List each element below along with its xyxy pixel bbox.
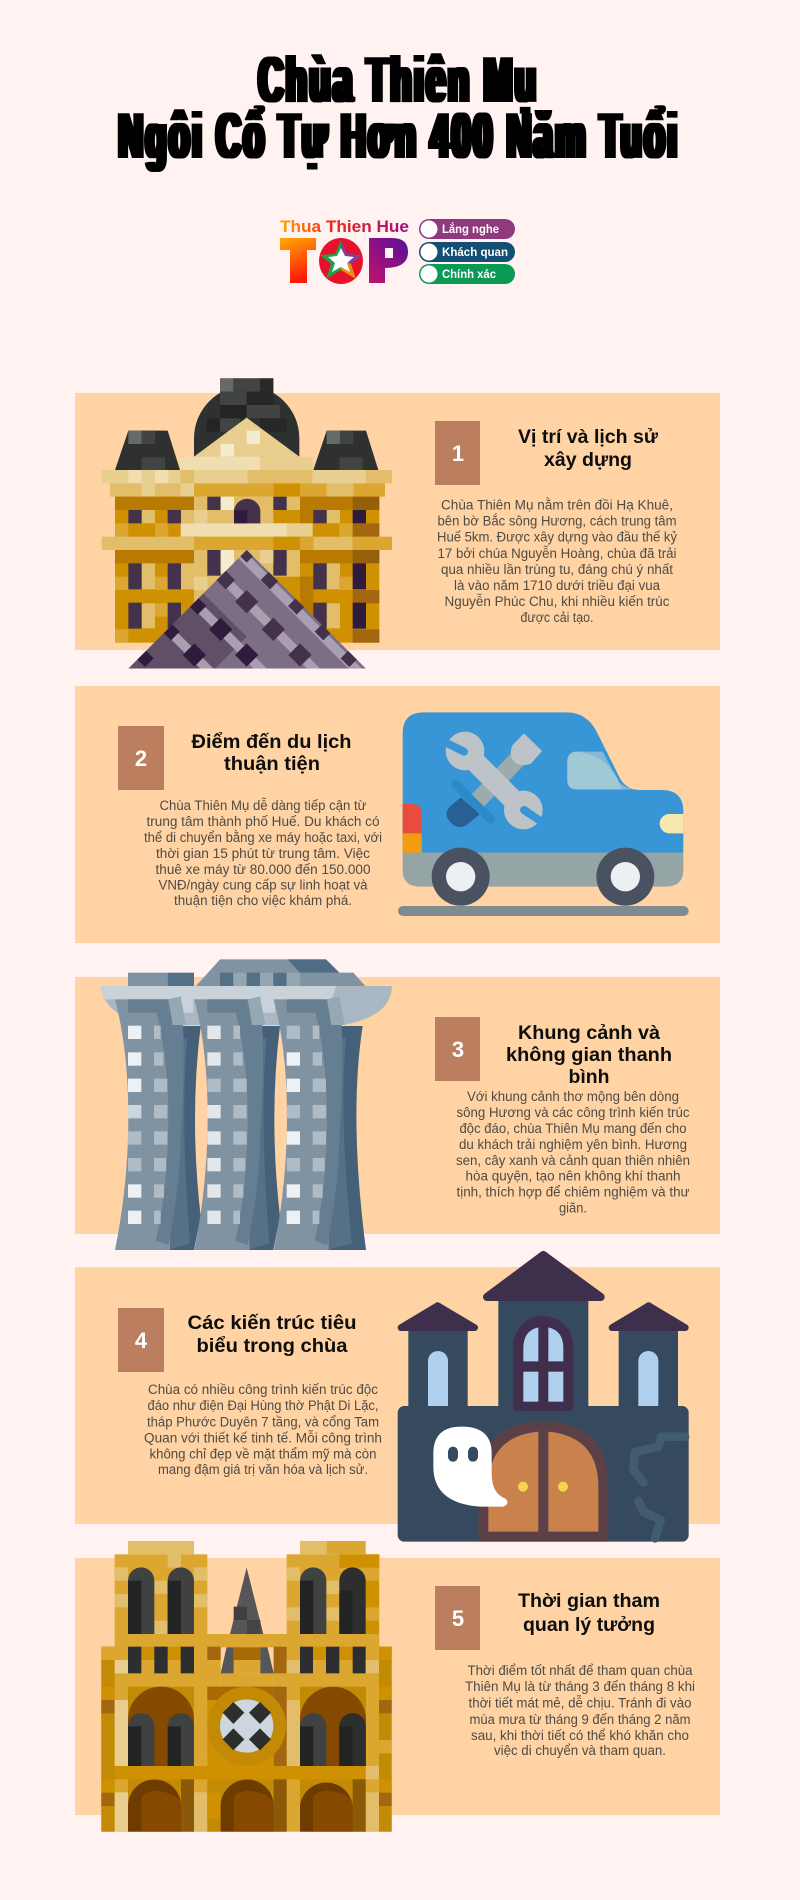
heading 4: Các kiến trúc tiêu	[188, 1313, 356, 1334]
heading 3: bình	[568, 1067, 610, 1088]
text block 5	[465, 1663, 695, 1758]
pill: lắng nghe	[419, 219, 515, 239]
pill: khách quan	[419, 242, 515, 262]
text block 2: Chùa Thiên Mụ dễ dàng tiếp cận từ	[160, 798, 366, 813]
text block 2	[144, 798, 382, 908]
text block 2: VNĐ/ngày cung cấp sự linh hoạt và	[158, 878, 368, 892]
heading 5: quan lý tưởng	[523, 1615, 655, 1636]
tools	[446, 732, 543, 829]
text block 4: mang đậm giá trị văn hóa và lịch sử.	[158, 1462, 368, 1477]
text block 2: trung tâm thành phố Huế. Du khách có	[146, 814, 380, 829]
number 3	[435, 1017, 480, 1081]
text block 5: Thời điểm tốt nhất để tham quan chùa	[468, 1663, 693, 1678]
text block 3: sông Hương và các công trình kiến trúc	[456, 1105, 690, 1120]
icon: repair van	[398, 712, 689, 916]
panel 1: background	[75, 393, 720, 650]
text block 2: thuận tiện cho việc khám phá.	[174, 893, 352, 908]
logo	[280, 217, 515, 284]
pill: chính xác: Chính xác	[442, 267, 496, 281]
text block 4: tháp Phước Duyên 7 tầng, và cổng Tam	[147, 1414, 379, 1430]
text block 3: độc đáo, chùa Thiên Mụ mang đến cho	[460, 1121, 686, 1136]
panel 3: background	[75, 977, 720, 1234]
number 3: 3	[452, 1037, 464, 1062]
text block 1	[437, 498, 677, 625]
text block 3: giãn.	[559, 1200, 587, 1216]
ghost	[433, 1427, 507, 1507]
heading 3: Khung cảnh và	[518, 1023, 660, 1044]
tower 2	[194, 997, 280, 1250]
heading 5: Thời gian tham	[518, 1591, 660, 1612]
text block 5: sau, khi thời tiết có thể khó khăn cho	[471, 1728, 689, 1743]
text block 4: Chùa có nhiều công trình kiến trúc độc	[148, 1382, 378, 1397]
text block 4: không chỉ đẹp về mặt thẩm mỹ mà còn	[150, 1446, 376, 1462]
heading 4: biểu trong chùa	[196, 1336, 348, 1357]
text block 2: thời gian 15 phút từ trung tâm. Việc	[156, 846, 370, 861]
number 2: 2	[135, 746, 147, 771]
text block 3: sen, cây xanh và cảnh quan thiên nhiên	[456, 1153, 690, 1168]
title: Chùa Thiên Mụ	[258, 43, 538, 116]
panel 5: background	[75, 1558, 720, 1815]
heading 1: Vị trí và lịch sử	[518, 427, 658, 448]
pill: lắng nghe: Lắng nghe	[442, 221, 499, 236]
text block 3: du khách trải nghiệm yên bình. Hương	[459, 1137, 687, 1152]
text block 5: việc di chuyển và tham quan.	[494, 1743, 666, 1758]
text block 4: Quan với thiết kế tinh tế. Mỗi công trình	[144, 1430, 382, 1446]
number 4: 4	[135, 1328, 148, 1353]
text block 5: Thiên Mụ là từ tháng 3 đến tháng 8 khi	[465, 1679, 695, 1694]
title	[118, 43, 680, 172]
text block 1: qua nhiều lần trùng tu, đáng chú ý nhất	[441, 562, 673, 577]
icon: cathedral	[101, 1541, 392, 1832]
panel 4: background	[75, 1267, 720, 1524]
heading 1	[518, 427, 658, 471]
tower 3	[274, 997, 366, 1250]
text block 2: thể di chuyển bằng xe máy hoặc taxi, với	[144, 830, 382, 845]
text block 5: mùa mưa từ tháng 9 đến tháng 2 năm	[470, 1712, 690, 1727]
number 5: 5	[452, 1606, 464, 1631]
upper arches	[128, 1687, 366, 1766]
text block 1: Nguyễn Phúc Chu, khi nhiều kiến trúc	[444, 594, 670, 609]
icon: twisted towers	[102, 959, 392, 1250]
pyramid	[128, 549, 366, 673]
number 1: 1	[452, 441, 464, 466]
icon: palace with pyramid	[102, 378, 392, 669]
text block 3: tịnh, thích hợp để chiêm nghiệm và thư	[456, 1184, 690, 1200]
heading 3	[506, 1023, 672, 1088]
panel 2: background	[75, 686, 720, 943]
text block 1: được cải tạo.	[520, 610, 594, 625]
text block 1: là vào năm 1710 dưới triều đại vua	[454, 578, 660, 593]
heading 1: xây dựng	[544, 450, 632, 471]
heading 2	[192, 732, 352, 775]
heading 2: thuận tiện	[224, 754, 320, 775]
heading 5	[518, 1591, 660, 1636]
lower arches	[128, 1779, 366, 1832]
number 1	[435, 421, 480, 485]
text block 4: đáo như điện Đại Hùng thờ Phật Di Lặc,	[148, 1398, 378, 1413]
text block 1: Chùa Thiên Mụ nằm trên đồi Hạ Khuê,	[441, 498, 673, 512]
text block 2: thuê xe máy từ 80.000 đến 150.000	[156, 862, 370, 877]
icon: haunted castle	[398, 1250, 690, 1543]
text block 5: thời tiết mát mẻ, dễ chịu. Tránh đi vào	[468, 1696, 692, 1710]
logo: Thua Thien Hue	[280, 217, 409, 236]
text block 3	[456, 1089, 690, 1216]
heading 2: Điểm đến du lịch	[192, 732, 352, 753]
text block 4	[144, 1382, 382, 1477]
pill: khách quan: Khách quan	[442, 245, 508, 259]
heading 4	[188, 1313, 356, 1357]
text block 1: bên bờ Bắc sông Hương, cách trung tâm	[438, 514, 676, 528]
pill: chính xác	[419, 264, 515, 284]
text block 1: 17 bởi chúa Nguyễn Hoàng, chùa đã trải	[438, 546, 676, 561]
number 4	[118, 1308, 164, 1372]
heading 3: không gian thanh	[506, 1045, 672, 1066]
number 2	[118, 726, 164, 790]
text block 1: Huế 5km. Được xây dựng vào đầu thế kỷ	[437, 530, 677, 544]
text block 3: Với khung cảnh thơ mộng bên dòng	[467, 1089, 679, 1104]
text block 3: hòa quyện, tạo nên không khí thanh	[466, 1168, 680, 1184]
number 5	[435, 1586, 480, 1650]
tower 1	[115, 997, 201, 1250]
rose window	[207, 1687, 287, 1766]
